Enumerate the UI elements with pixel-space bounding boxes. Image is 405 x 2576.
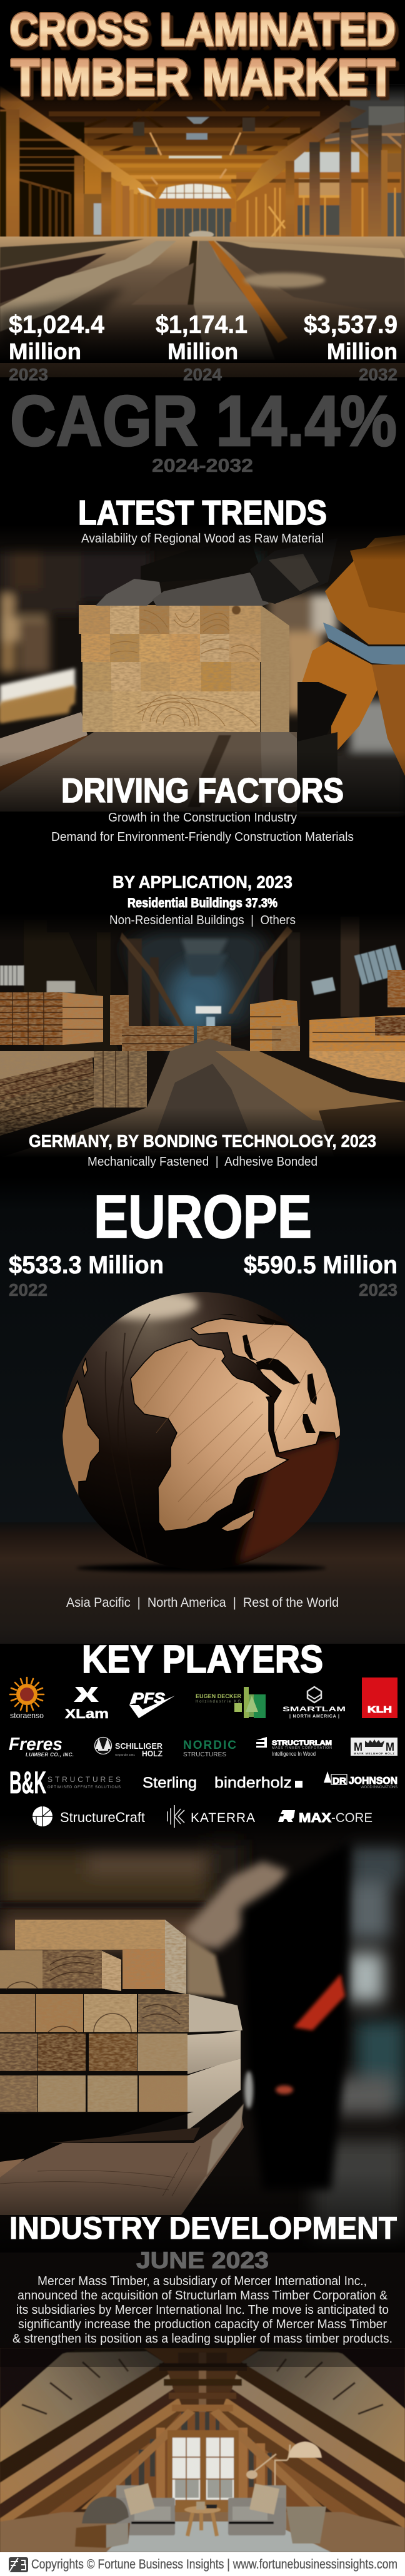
logo: B&K Structures [9, 1765, 121, 1800]
paragraph: industry development detail: announced the acquisition of Structurlam Mass Timber Corporation & [18, 2289, 388, 2303]
title: CROSS [10, 5, 149, 55]
logo: Mayr Melnhof Holz [351, 1738, 398, 1756]
warehouse floor [0, 1039, 405, 1158]
back wall [91, 2412, 316, 2512]
ceiling beams [49, 111, 320, 116]
stat: 2032 market size: 2032 [359, 365, 398, 384]
logo: Schilliger Holz: HOLZ [142, 1749, 162, 1758]
logo: Max-Core [278, 1810, 372, 1825]
logo: B&K Structures: STRUCTURES [48, 1775, 121, 1784]
logo: DR Johnson [324, 1771, 398, 1789]
segment: Germany by bonding technology [29, 1131, 376, 1169]
logo: Freres Lumber: LUMBER CO., INC. [26, 1752, 74, 1758]
seas cut into the land [220, 1314, 317, 1433]
CAGR figure: 2024-2032 [152, 456, 253, 476]
logo: Nordic Structures [183, 1739, 236, 1758]
stat: Europe 2022: 2022 [9, 1280, 48, 1300]
segment: by application [109, 872, 296, 927]
logo: Smartlam: SMARTLAM [282, 1706, 346, 1713]
logo: Eugen Decker [196, 1687, 266, 1718]
paragraph: industry development detail [12, 2274, 392, 2346]
footer bar [0, 2552, 405, 2576]
title: TIMBER [11, 49, 189, 106]
logo: StructureCraft [32, 1806, 145, 1826]
title: TIMBER [14, 53, 192, 109]
logo: Schilliger Holz [95, 1737, 162, 1758]
collar beams [199, 2353, 206, 2434]
segment: Germany by bonding technology: GERMANY, BY BONDING TECHNOLOGY, 2023 [29, 1131, 376, 1151]
title [10, 5, 399, 109]
logo: Max-Core: -CORE [331, 1811, 372, 1825]
title: CROSS [13, 8, 152, 58]
logo: binderholz: binderholz [214, 1774, 292, 1791]
floor [0, 237, 405, 377]
stat: Europe 2023: 2023 [359, 1280, 398, 1300]
table [184, 2506, 221, 2513]
segment: Germany by bonding technology: Mechanically Fastened | Adhesive Bonded [88, 1155, 318, 1169]
right wall [236, 172, 405, 238]
logo: Structurlam: STRUCTURLAM [272, 1739, 332, 1747]
logo: Schilliger Holz: SCHILLIGER [115, 1742, 162, 1751]
logo: Stora Enso: storaenso [10, 1711, 44, 1720]
stat: Europe 2023: $590.5 Million [244, 1251, 398, 1279]
logo: PFS [129, 1690, 175, 1718]
stat: Europe 2023 [244, 1251, 398, 1300]
logo: Mayr Melnhof Holz: M [354, 1741, 362, 1753]
gloves and sleeves [141, 538, 262, 591]
stat: 2024 market size: 2024 [183, 365, 222, 384]
far end window [159, 184, 231, 198]
lower planks [0, 712, 88, 766]
logo: B&K Structures: OPTIMISED OFFSITE SOLUTIONS [48, 1786, 121, 1789]
orange work clothing [325, 535, 405, 644]
paragraph: industry development detail: its subsidiaries by Mercer International Inc. The move is anticipated to [16, 2303, 389, 2317]
logo: Structurlam: MASS TIMBER CORPORATION [272, 1746, 332, 1750]
logo: PFS: PFS [132, 1690, 165, 1707]
logo: Smartlam: | NORTH AMERICA | [289, 1714, 339, 1719]
throw blanket [82, 2497, 129, 2523]
wood grain [144, 1323, 325, 1520]
basket [286, 2507, 326, 2543]
stat: 2023 market size: $1,024.4 [9, 311, 105, 339]
logo: Katerra: KATERRA [191, 1811, 255, 1825]
logo: DR Johnson: WOOD INNOVATIONS [361, 1786, 398, 1789]
heading: Europe: EUROPE [94, 1183, 312, 1251]
logo: XLam [65, 1687, 109, 1721]
logo: Nordic Structures: STRUCTURES [183, 1751, 226, 1758]
left long beam [0, 86, 150, 196]
lumber stacks [0, 970, 405, 1136]
stat: 2023 market size: Million [9, 339, 81, 364]
logo: Eugen Decker: EUGEN DECKER [196, 1693, 241, 1700]
logo: DR Johnson: JOHNSON [349, 1776, 398, 1786]
logo: Stora Enso [10, 1677, 44, 1720]
warehouse roof and blue haze [125, 926, 269, 1026]
regions list: Asia Pacific | North America | Rest of the World [66, 1596, 339, 1610]
logo: Sterling: Sterling [142, 1774, 197, 1791]
paragraph: industry development detail: significantly increase the production capacity of Mercer Mass Timber [18, 2318, 387, 2331]
continents [62, 1318, 341, 1532]
logo: Schilliger Holz: Gegründet 1861 [115, 1753, 135, 1756]
stat: Europe 2022 [9, 1251, 164, 1300]
stat: 2024 market size: $1,174.1 [156, 311, 248, 339]
logo: StructureCraft: StructureCraft [60, 1810, 145, 1825]
panel: timber warehouse photo [0, 914, 405, 1158]
heading: driving factors: Growth in the Construction Industry [108, 811, 297, 825]
roof trusses [56, 88, 312, 153]
heading: industry development: INDUSTRY DEVELOPMENT [9, 2211, 397, 2246]
timber block [79, 605, 289, 732]
logo: B&K Structures: B&K [9, 1765, 46, 1800]
paragraph: industry development detail: Mercer Mass Timber, a subsidiary of Mercer International Inc., [38, 2274, 367, 2288]
heading: driving factors: Demand for Environment-Friendly Construction Materials [51, 830, 354, 844]
logo: Structurlam: Intelligence In Wood [272, 1751, 316, 1757]
French window [168, 2430, 239, 2507]
icon: Fortune Business Insights logo [9, 2557, 28, 2572]
panel: worker stacking timber blocks photo [0, 526, 405, 812]
logo: Smartlam [282, 1687, 346, 1719]
armchairs [116, 2485, 140, 2529]
stat: 2032 market size: Million [327, 339, 398, 364]
panel: Europe regional background [0, 1176, 405, 1644]
stat: 2024 market size [156, 311, 248, 384]
logo: Freres Lumber: Freres [9, 1734, 62, 1754]
logo: Mayr Melnhof Holz: MAYR MELNHOF HOLZ [354, 1752, 394, 1755]
logo: Max-Core: MAX [299, 1811, 331, 1825]
stat: 2023 market size [9, 311, 105, 384]
left interior wall [19, 122, 84, 238]
panel: attic interior photo [0, 2348, 405, 2552]
panel: hero photo of timber frame building [0, 84, 405, 377]
heading: latest trends: Availability of Regional Wood as Raw Material [81, 532, 324, 546]
illustration: wooden globe [62, 1290, 341, 1572]
stat: 2032 market size [304, 311, 398, 384]
heading: latest trends [78, 493, 327, 546]
stat: 2023 market size: 2023 [9, 365, 48, 384]
logo: XLam: XLam [65, 1707, 109, 1721]
logo: Eugen Decker: Holzindustrie KG [196, 1700, 241, 1704]
paragraph: industry development detail: & strengthen its position as a leading supplier of mass timber products. [12, 2332, 392, 2346]
stat: 2032 market size: $3,537.9 [304, 311, 398, 339]
logo: Structurlam [256, 1737, 332, 1757]
panel: timber stack and worker photo [0, 1815, 405, 2348]
heading: driving factors [51, 771, 354, 844]
stat: 2024 market size: Million [168, 339, 238, 364]
segment: by application: Residential Buildings 37.3% [128, 896, 278, 910]
floor lamp [250, 2445, 290, 2485]
logo: KLH [362, 1677, 398, 1718]
segment: by application: BY APPLICATION, 2023 [112, 872, 292, 892]
logo: DR Johnson: DR [332, 1776, 346, 1786]
logo: Nordic Structures: NORDIC [183, 1739, 236, 1752]
title: TIMBER [11, 49, 189, 106]
logo: Mayr Melnhof Holz: M [386, 1741, 394, 1753]
heading: driving factors: DRIVING FACTORS [61, 771, 344, 810]
logo: Katerra [168, 1805, 255, 1828]
floor and rug [0, 2512, 405, 2552]
logo: KLH: KLH [368, 1704, 392, 1715]
heading: industry development: JUNE 2023 [136, 2248, 269, 2273]
segment: by application: Non-Residential Buildings | Others [109, 914, 296, 927]
rafters near window [81, 2409, 195, 2509]
heading: industry development [9, 2211, 397, 2273]
title: CROSS [10, 5, 149, 55]
stat: Europe 2022: $533.3 Million [9, 1251, 164, 1279]
heading: key players: KEY PLAYERS [82, 1638, 323, 1681]
heading: latest trends: LATEST TRENDS [78, 493, 327, 532]
